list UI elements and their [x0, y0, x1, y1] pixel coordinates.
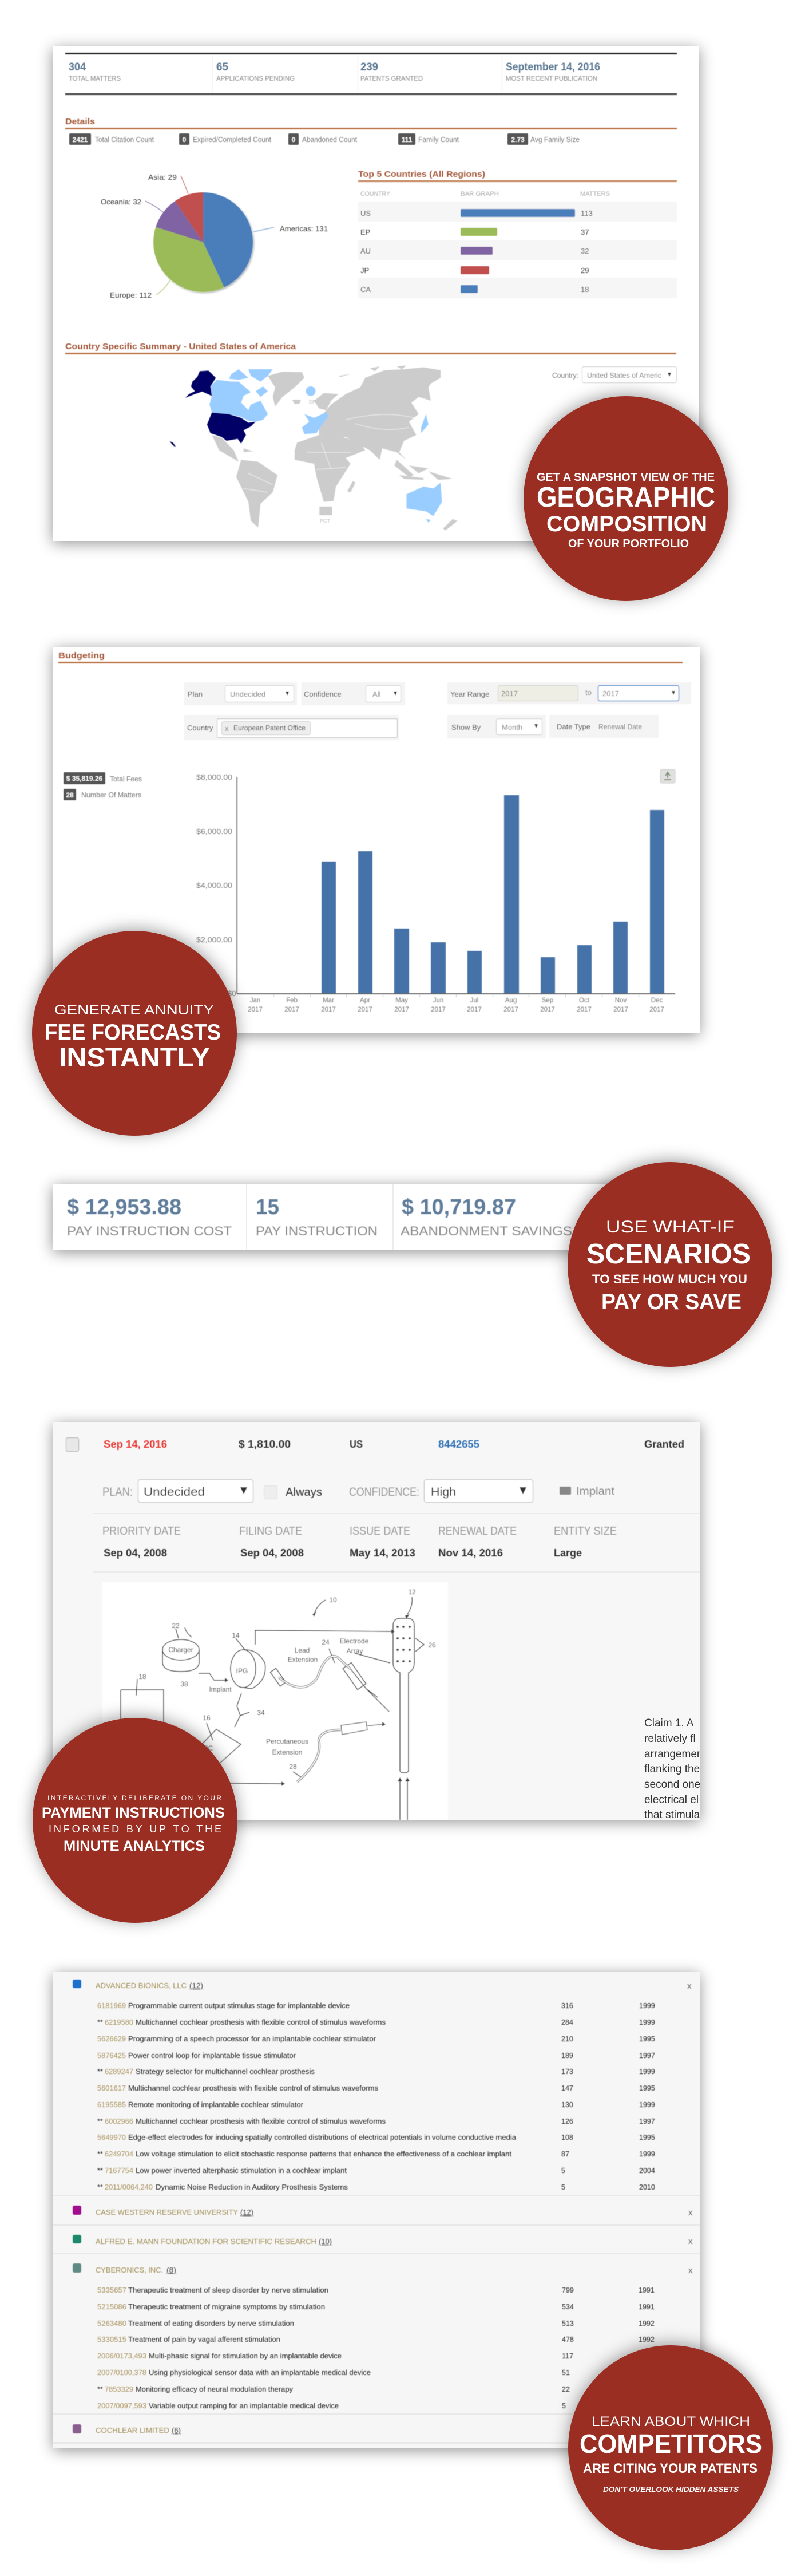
group: advanced bionics: Programmable current output stimulus stage for implantable device: [128, 2002, 350, 2010]
totals badges: 28: [66, 791, 74, 799]
bar chart: monthly fee forecast: 2017: [394, 1006, 409, 1013]
group: advanced bionics: 6181969: [97, 2002, 126, 2010]
heading: details: [65, 117, 677, 129]
stat: pay instruction count: PAY INSTRUCTION: [256, 1224, 378, 1238]
patent date columns: Sep 04, 2008: [104, 1547, 167, 1559]
stat: abandonment savings: ABANDONMENT SAVINGS: [401, 1224, 572, 1238]
world map: EP: [309, 399, 316, 405]
patent drawing figure: Electrode: [340, 1637, 369, 1645]
callout: geographic composition: GET A SNAPSHOT VIEW OF THE: [537, 471, 715, 484]
patent drawing figure: PC: [204, 1744, 213, 1752]
table: top 5 countries: 29: [581, 266, 589, 275]
stat: pay instruction count: [256, 1195, 378, 1238]
summary statistics strip: TOTAL MATTERS: [69, 74, 121, 82]
group: cyberonics: (8): [166, 2266, 176, 2274]
callout: geographic composition: COMPOSITION: [546, 512, 707, 536]
patent date columns: Nov 14, 2016: [438, 1547, 503, 1559]
panel: budgeting card: [53, 647, 700, 1033]
group: advanced bionics: 2004: [639, 2167, 655, 2175]
group: advanced bionics: Power control loop for implantable tissue stimulator: [128, 2052, 296, 2060]
table: top 5 countries: [358, 169, 677, 298]
table: top 5 countries: BAR GRAPH: [461, 191, 499, 197]
group: advanced bionics: 1999: [639, 2101, 655, 2109]
group: advanced bionics: 5626629: [97, 2035, 126, 2043]
group: advanced bionics: ADVANCED BIONICS, LLC: [96, 1982, 187, 1990]
callout: competitors: ARE CITING YOUR PATENTS: [583, 2461, 758, 2476]
callout: what-if scenarios: USE WHAT-IF: [606, 1218, 735, 1236]
bar chart: monthly fee forecast: $6,000.00: [196, 827, 232, 836]
bar chart: monthly fee forecast: 2017: [467, 1006, 482, 1013]
group: advanced bionics: 1999: [639, 2002, 655, 2010]
group: advanced bionics: Multichannel cochlear prosthesis with flexible control of stimulus waveforms: [136, 2117, 386, 2125]
group: cochlear limited: (6): [172, 2427, 181, 2435]
group: cyberonics: 1992: [639, 2336, 655, 2344]
bar chart: monthly fee forecast: 2017: [577, 1006, 592, 1013]
bar chart: monthly fee forecast: 2017: [284, 1006, 299, 1013]
bar chart: monthly fee forecast: May: [395, 997, 408, 1004]
group: cyberonics: x: [688, 2266, 693, 2275]
group: cyberonics: Therapeutic treatment of migraine symptoms by stimulation: [128, 2303, 325, 2311]
callout: payment instructions: INFORMED BY UP TO THE: [49, 1823, 221, 1835]
group: cyberonics: 478: [562, 2336, 574, 2344]
patent drawing figure: IPG: [236, 1667, 248, 1675]
group: advanced bionics: 108: [561, 2134, 573, 2142]
group: advanced bionics: 87: [561, 2150, 569, 2158]
filter controls: Confidence: [304, 690, 342, 698]
patent drawing figure: 16: [203, 1714, 211, 1722]
group: advanced bionics: **: [97, 2183, 103, 2191]
group: cyberonics: Monitoring efficacy of neural modulation therapy: [136, 2385, 294, 2393]
group: advanced bionics: 5: [561, 2167, 565, 2175]
callout: competitors: DON'T OVERLOOK HIDDEN ASSETS: [603, 2486, 739, 2494]
group: advanced bionics: [73, 1980, 692, 2191]
group: advanced bionics: Low power inverted alterphasic stimulation in a cochlear implant: [136, 2167, 347, 2175]
bar chart: monthly fee forecast: 2017: [503, 1006, 518, 1013]
group: advanced bionics: Strategy selector for multichannel cochlear prosthesis: [136, 2068, 315, 2076]
group: cyberonics: 51: [562, 2369, 570, 2377]
group: advanced bionics: Low voltage stimulation to elicit stochastic response patterns that enhance the effectiveness of a cochlear implant: [136, 2150, 512, 2158]
group: cyberonics: 1991: [639, 2286, 655, 2294]
summary statistics strip: 239: [360, 61, 378, 73]
group: case western: [73, 2206, 693, 2218]
bar chart: monthly fee forecast: Nov: [615, 997, 627, 1004]
matter summary row: Granted: [644, 1439, 684, 1450]
group: advanced bionics: 284: [561, 2018, 573, 2026]
totals badges: [64, 772, 142, 800]
stat: abandonment savings: $ 10,719.87: [402, 1195, 516, 1219]
heading: details: Details: [65, 117, 95, 127]
bar chart: monthly fee forecast: 2017: [248, 1006, 263, 1013]
bar chart: monthly fee forecast: Aug: [505, 997, 517, 1004]
group: advanced bionics: Remote monitoring of implantable cochlear stimulator: [128, 2101, 303, 2109]
patent claim excerpt: [644, 1718, 700, 1818]
matter summary row: $ 1,810.00: [239, 1439, 291, 1450]
callout: what-if scenarios: PAY OR SAVE: [601, 1290, 742, 1314]
group: cyberonics: 2007/0097,593: [97, 2402, 146, 2410]
bar chart: monthly fee forecast: Oct: [579, 997, 590, 1004]
callout: geographic composition: [524, 396, 728, 601]
country selector: Country:: [552, 371, 578, 380]
plan and confidence controls: CONFIDENCE:: [349, 1485, 419, 1499]
icon: chart export: [660, 769, 675, 783]
details count badges: Abandoned Count: [302, 135, 357, 144]
patent date columns: FILING DATE: [239, 1525, 302, 1538]
table: top 5 countries: CA: [360, 285, 371, 294]
bar chart: monthly fee forecast: 2017: [540, 1006, 555, 1013]
patent claim excerpt: Claim 1. A: [644, 1717, 694, 1729]
patent drawing figure: 38: [180, 1680, 188, 1688]
callout: what-if scenarios: [568, 1162, 772, 1367]
group: alfred e. mann foundation: ALFRED E. MANN FOUNDATION FOR SCIENTIFIC RESEARCH: [96, 2238, 316, 2246]
bar chart: monthly fee forecast: Dec: [651, 997, 663, 1004]
pie chart: matters by region: Europe: 112: [110, 291, 152, 299]
plan and confidence controls: Undecided: [144, 1485, 205, 1499]
heading: budgeting: Budgeting: [58, 651, 105, 661]
filter controls: European Patent Office: [233, 724, 306, 732]
group: advanced bionics: (12): [189, 1982, 203, 1990]
stat: pay instruction cost: $ 12,953.88: [67, 1195, 181, 1219]
details count badges: [69, 133, 580, 145]
callout: geographic composition: GEOGRAPHIC: [537, 482, 715, 513]
group: advanced bionics: 5876425: [97, 2052, 126, 2060]
group: advanced bionics: 130: [561, 2101, 573, 2109]
patent date columns: Large: [554, 1547, 582, 1559]
filter controls: [184, 682, 691, 740]
patent date columns: PRIORITY DATE: [102, 1525, 181, 1538]
group: cochlear limited: COCHLEAR LIMITED: [96, 2427, 169, 2435]
callout: payment instructions: INTERACTIVELY DELIBERATE ON YOUR: [47, 1794, 221, 1802]
summary statistics strip: 65: [216, 61, 228, 73]
filter controls: to: [585, 688, 592, 697]
table: top 5 countries: COUNTRY: [360, 191, 391, 197]
totals badges: Number Of Matters: [81, 791, 141, 799]
group: advanced bionics: 6002966: [105, 2117, 133, 2125]
panel: what-if totals strip: [53, 1184, 665, 1250]
callout: fee forecasts: [32, 931, 237, 1136]
matter summary row: Sep 14, 2016: [104, 1439, 167, 1450]
table: top 5 countries: 32: [581, 247, 589, 255]
bar chart: monthly fee forecast: Jul: [470, 997, 478, 1004]
group: cyberonics: 799: [562, 2286, 574, 2294]
country selector: [552, 366, 676, 382]
summary statistics strip: [65, 53, 677, 95]
group: alfred e. mann foundation: x: [688, 2237, 693, 2246]
stat: pay instruction count: 15: [256, 1195, 279, 1219]
group: case western: (12): [240, 2208, 253, 2217]
details count badges: 0: [183, 136, 187, 144]
group: advanced bionics: 316: [561, 2002, 573, 2010]
bar chart: monthly fee forecast: $8,000.00: [196, 773, 232, 781]
callout: fee forecasts: FEE FORECASTS: [45, 1020, 221, 1045]
group: advanced bionics: 189: [561, 2052, 573, 2060]
patent drawing figure: 28: [289, 1763, 297, 1771]
patent date columns: ENTITY SIZE: [554, 1525, 617, 1538]
bar chart: monthly fee forecast: Jan: [250, 997, 260, 1004]
summary statistics strip: APPLICATIONS PENDING: [216, 74, 295, 82]
group: advanced bionics: Dynamic Noise Reduction in Auditory Prosthesis Systems: [156, 2183, 348, 2191]
callout: competitors: [568, 2345, 773, 2550]
filter controls: Month: [502, 723, 522, 732]
callout: payment instructions: PAYMENT INSTRUCTIONS: [42, 1805, 225, 1821]
group: cyberonics: 117: [562, 2352, 573, 2360]
bar chart: monthly fee forecast: 2017: [431, 1006, 446, 1013]
group: advanced bionics: 126: [561, 2117, 573, 2125]
bar chart: monthly fee forecast: Feb: [286, 997, 298, 1004]
pie chart: matters by region: [101, 173, 328, 299]
patent date columns: May 14, 2013: [350, 1547, 415, 1559]
patent drawing figure: Charger: [168, 1646, 193, 1654]
filter controls: 2017: [501, 689, 518, 698]
callout: what-if scenarios: SCENARIOS: [586, 1239, 751, 1270]
group: advanced bionics: 2010: [639, 2183, 655, 2191]
group: cyberonics: **: [97, 2385, 103, 2393]
group: cyberonics: Variable output ramping for an implantable medical device: [149, 2402, 339, 2410]
group: advanced bionics: 6195585: [97, 2101, 126, 2109]
patent drawing figure: 12: [408, 1588, 416, 1596]
patent drawing figure: Percutaneous: [266, 1737, 308, 1745]
bar chart: monthly fee forecast: Apr: [360, 997, 370, 1004]
patent claim excerpt: second one: [644, 1779, 700, 1791]
group: cyberonics: Treatment of pain by vagal afferent stimulation: [128, 2336, 280, 2344]
patent drawing figure: 22: [172, 1622, 180, 1630]
group: advanced bionics: 173: [561, 2068, 573, 2076]
plan and confidence controls: Always: [286, 1486, 322, 1499]
heading: country specific summary: Country Specific Summary - United States of America: [65, 342, 296, 351]
world map: PCT: [320, 518, 331, 524]
group: alfred e. mann foundation: (10): [319, 2238, 332, 2246]
group: advanced bionics: 1995: [639, 2084, 655, 2092]
bar chart: monthly fee forecast: Sep: [542, 997, 553, 1004]
filter controls: Undecided: [230, 690, 265, 698]
group: cyberonics: 7853329: [105, 2385, 133, 2393]
bar chart: monthly fee forecast: 2017: [321, 1006, 336, 1013]
totals badges: $ 35,819.26: [66, 775, 103, 783]
group: cyberonics: CYBERONICS, INC.: [96, 2266, 163, 2274]
group: advanced bionics: 2011/0064,240: [105, 2183, 153, 2191]
group: advanced bionics: 147: [561, 2084, 573, 2092]
group: advanced bionics: Multichannel cochlear prosthesis with flexible control of stimulus waveforms: [136, 2018, 386, 2026]
group: cyberonics: Multi-phasic signal for stimulation by an implantable device: [149, 2352, 342, 2360]
group: advanced bionics: 7167754: [105, 2167, 133, 2175]
group: cochlear limited: [73, 2424, 181, 2435]
bar chart: monthly fee forecast: $4,000.00: [196, 881, 232, 890]
group: advanced bionics: Edge-effect electrodes for inducing spatially controlled distributions of electrical potentials in volume conductive media: [128, 2134, 516, 2142]
callout: fee forecasts: INSTANTLY: [59, 1042, 210, 1072]
patent drawing figure: 24: [322, 1638, 330, 1646]
summary statistics strip: PATENTS GRANTED: [360, 74, 423, 82]
table: top 5 countries: MATTERS: [580, 191, 610, 197]
group: advanced bionics: 1997: [639, 2117, 655, 2125]
group: advanced bionics: 1999: [639, 2150, 655, 2158]
heading: budgeting: [58, 651, 683, 663]
summary statistics strip: September 14, 2016: [506, 61, 600, 73]
group: cyberonics: 1991: [639, 2303, 655, 2311]
group: advanced bionics: 1995: [639, 2035, 655, 2043]
matter summary row: US: [350, 1439, 363, 1450]
patent drawing figure: [102, 1582, 448, 1820]
group: advanced bionics: **: [97, 2068, 103, 2076]
bar chart: monthly fee forecast: Mar: [323, 997, 334, 1004]
details count badges: 2421: [73, 136, 88, 144]
callout: geographic composition: OF YOUR PORTFOLIO: [568, 538, 689, 550]
table: top 5 countries: US: [360, 209, 371, 218]
table: top 5 countries: JP: [360, 266, 369, 275]
callout: what-if scenarios: TO SEE HOW MUCH YOU: [592, 1272, 747, 1286]
group: advanced bionics: **: [97, 2150, 103, 2158]
pie chart: matters by region: Asia: 29: [148, 173, 177, 181]
bar chart: monthly fee forecast: Jun: [433, 997, 443, 1004]
table: top 5 countries: 37: [581, 228, 589, 236]
filter controls: Plan: [188, 690, 203, 698]
group: advanced bionics: Multichannel cochlear prosthesis with flexible control of stimulus waveforms: [128, 2084, 378, 2092]
details count badges: Total Citation Count: [95, 135, 154, 144]
group: advanced bionics: 1995: [639, 2134, 655, 2142]
group: advanced bionics: 1997: [639, 2052, 655, 2060]
group: cyberonics: Treatment of eating disorders by nerve stimulation: [128, 2320, 294, 2328]
plan and confidence controls: Implant: [576, 1485, 615, 1498]
patent date columns: [102, 1525, 617, 1559]
pie chart: matters by region: Americas: 131: [280, 224, 328, 233]
group: advanced bionics: 1999: [639, 2018, 655, 2026]
bar chart: monthly fee forecast: $0: [228, 989, 236, 998]
table: top 5 countries: Top 5 Countries (All Regions): [358, 169, 485, 179]
table: top 5 countries: 18: [581, 285, 589, 294]
group: advanced bionics: 5601617: [97, 2084, 126, 2092]
heading: country specific summary: [65, 342, 676, 354]
patent drawing figure: Array: [347, 1647, 363, 1655]
callout: payment instructions: [33, 1718, 237, 1923]
plan and confidence controls: PLAN:: [102, 1485, 133, 1499]
summary statistics strip: 304: [69, 61, 86, 73]
patent drawing figure: Implant: [209, 1685, 232, 1693]
group: case western: x: [688, 2208, 693, 2218]
stat: pay instruction cost: [67, 1195, 232, 1238]
bar chart: monthly fee forecast: 2017: [613, 1006, 628, 1013]
patent drawing figure: 34: [257, 1709, 265, 1717]
details count badges: 2.73: [511, 136, 525, 144]
totals badges: Total Fees: [110, 775, 142, 783]
patent drawing figure: 14: [232, 1631, 240, 1639]
group: case western: CASE WESTERN RESERVE UNIVERSITY: [96, 2208, 239, 2217]
group: cyberonics: [73, 2263, 693, 2410]
patent date columns: Sep 04, 2008: [240, 1547, 304, 1559]
filter controls: x: [225, 724, 229, 733]
group: advanced bionics: **: [97, 2167, 103, 2175]
callout: payment instructions: MINUTE ANALYTICS: [64, 1838, 205, 1854]
group: advanced bionics: 6289247: [105, 2068, 133, 2076]
group: cyberonics: 5335657: [97, 2286, 126, 2294]
filter controls: All: [372, 690, 381, 698]
matter summary row: 8442655: [438, 1439, 479, 1450]
group: cyberonics: 534: [562, 2303, 574, 2311]
panel: portfolio overview card: [53, 46, 699, 541]
patent drawing figure: 18: [138, 1673, 146, 1681]
group: cyberonics: 5: [562, 2402, 566, 2410]
group: advanced bionics: 210: [561, 2035, 573, 2043]
callout: competitors: LEARN ABOUT WHICH: [592, 2414, 750, 2429]
patent drawing figure: 26: [428, 1641, 436, 1649]
patent claim excerpt: flanking the: [644, 1763, 700, 1775]
patent drawing figure: Extension: [288, 1656, 318, 1664]
group: cyberonics: 513: [562, 2320, 574, 2328]
plan and confidence controls: High: [431, 1485, 456, 1499]
group: cyberonics: 5330515: [97, 2336, 126, 2344]
patent claim excerpt: electrical el: [644, 1794, 699, 1806]
details count badges: Family Count: [418, 135, 459, 144]
stat: pay instruction cost: PAY INSTRUCTION COST: [67, 1224, 232, 1238]
patent drawing figure: Lead: [295, 1646, 310, 1654]
bar chart: monthly fee forecast: $2,000.00: [196, 935, 232, 944]
bar chart: monthly fee forecast: 2017: [649, 1006, 664, 1013]
group: cyberonics: 2007/0100,378: [97, 2369, 146, 2377]
group: advanced bionics: 6219580: [105, 2018, 133, 2026]
group: advanced bionics: 5: [561, 2183, 565, 2191]
matter summary row: [66, 1438, 684, 1452]
table: top 5 countries: EP: [360, 228, 370, 236]
group: advanced bionics: Programming of a speech processor for an implantable cochlear stimulator: [128, 2035, 376, 2043]
filter controls: 2017: [602, 689, 619, 698]
group: cyberonics: 2006/0173,493: [97, 2352, 146, 2360]
bar chart: monthly fee forecast: 2017: [358, 1006, 372, 1013]
panel: citing competitors list: [53, 1972, 700, 2448]
table: top 5 countries: AU: [360, 247, 371, 255]
patent drawing figure: 10: [329, 1596, 337, 1604]
filter controls: Country: [187, 724, 213, 732]
callout: fee forecasts: GENERATE ANNUITY: [54, 1002, 214, 1018]
patent claim excerpt: arrangement: [644, 1748, 706, 1760]
details count badges: 111: [402, 136, 413, 144]
filter controls: Renewal Date: [598, 722, 642, 731]
patent date columns: RENEWAL DATE: [438, 1525, 517, 1538]
group: cyberonics: 22: [562, 2385, 570, 2393]
plan and confidence controls: [102, 1479, 615, 1502]
details count badges: Avg Family Size: [530, 135, 580, 144]
country selector: United States of Americ: [587, 371, 661, 380]
group: advanced bionics: 1999: [639, 2068, 655, 2076]
table: top 5 countries: 113: [581, 209, 593, 218]
bar chart: monthly fee forecast: [196, 773, 675, 1013]
panel: patent matter detail card: [53, 1422, 706, 1821]
pie chart: matters by region: Oceania: 32: [101, 197, 141, 206]
group: advanced bionics: 6249704: [105, 2150, 133, 2158]
callout: competitors: COMPETITORS: [580, 2429, 762, 2459]
patent drawing figure: Extension: [272, 1748, 302, 1756]
group: cyberonics: 5215086: [97, 2303, 126, 2311]
summary statistics strip: MOST RECENT PUBLICATION: [506, 74, 597, 82]
stat: abandonment savings: [401, 1195, 572, 1238]
group: advanced bionics: **: [97, 2018, 103, 2026]
group: advanced bionics: **: [97, 2117, 103, 2125]
patent claim excerpt: relatively fl: [644, 1733, 696, 1745]
filter controls: Date Type: [557, 722, 590, 731]
patent claim excerpt: that stimula: [644, 1809, 700, 1821]
group: advanced bionics: 5649970: [97, 2134, 126, 2142]
group: alfred e. mann foundation: [73, 2235, 693, 2246]
details count badges: Expired/Completed Count: [193, 135, 271, 144]
patent date columns: ISSUE DATE: [350, 1525, 410, 1538]
group: cyberonics: Using physiological sensor data with an implantable medical device: [149, 2369, 371, 2377]
group: advanced bionics: x: [687, 1981, 692, 1991]
group: cyberonics: Therapeutic treatment of sleep disorder by nerve stimulation: [128, 2286, 328, 2294]
group: cyberonics: 5263480: [97, 2320, 126, 2328]
group: cyberonics: 1992: [639, 2320, 655, 2328]
filter controls: Year Range: [450, 690, 489, 698]
filter controls: Show By: [451, 723, 481, 732]
world map: [169, 365, 458, 531]
details count badges: 0: [292, 136, 296, 144]
